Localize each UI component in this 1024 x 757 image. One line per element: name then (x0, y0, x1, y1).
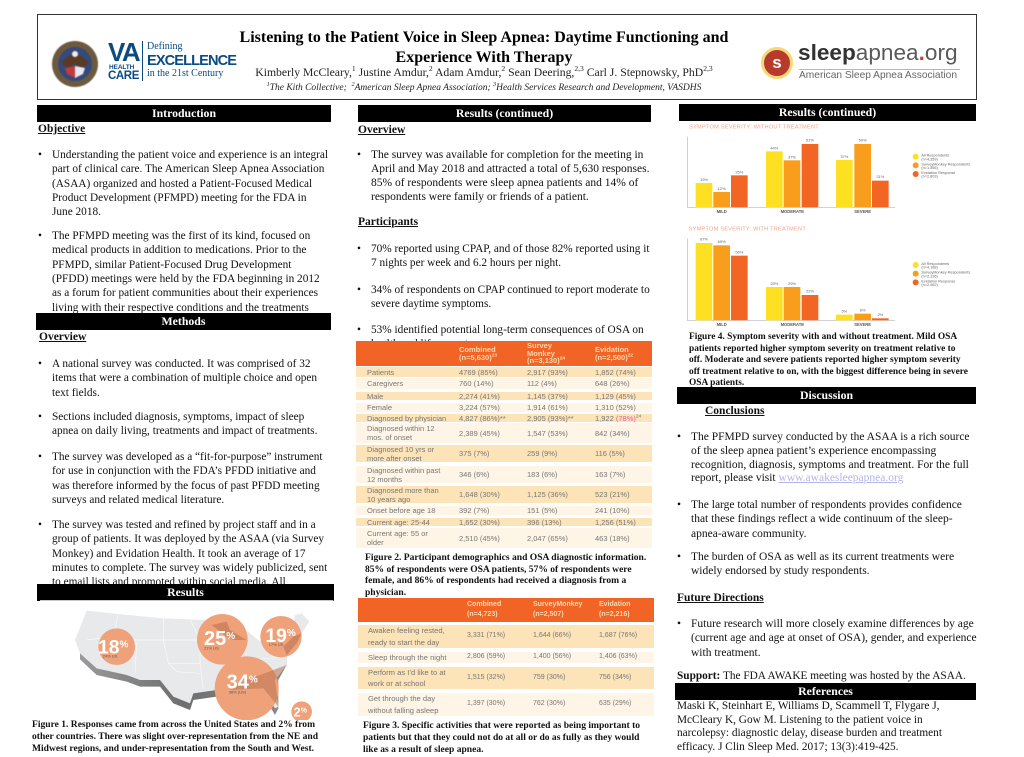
figure 3 caption: patients but that they could not do at all or do as fully as they would (363, 732, 639, 743)
icon: sleepapnea s badge: s (772, 53, 782, 72)
table: desired activities: 1,397 (30%) (467, 700, 505, 707)
text: future research: with treatment. (691, 647, 761, 659)
table: participant demographics: 151 (5%) (527, 506, 557, 515)
table: participant demographics: Female (367, 403, 392, 412)
heading bar: references (675, 683, 976, 700)
table: desired activities (358, 598, 654, 716)
text: survey availability: The survey was available for completion for the meeting in (371, 149, 643, 161)
title: Experience With Therapy (396, 49, 572, 66)
heading bar: discussion: Discussion (800, 388, 853, 402)
text: sections: apnea on daily living, treatments and impact of treatments. (52, 425, 317, 437)
figure 1 caption: Figure 1. Responses came from across the United States and 2% from (32, 719, 315, 730)
table: participant demographics: 2,905 (93%)** (527, 414, 574, 422)
figure 4 caption: off treatment relative to on, with the biggest difference being in severe (689, 366, 968, 376)
text: fit for purpose: The survey was developed as a “fit-for-purpose” instrument (52, 451, 322, 463)
text: respondents: that these findings reflect a wide continuum of the sleep- (691, 513, 953, 525)
text: national survey (52, 357, 317, 400)
VA Health Care logo: EXCELLENCE (147, 53, 236, 69)
table: participant demographics: 842 (34%) (595, 428, 630, 438)
text: tested and refined: minutes to complete. The survey was widely publicized, sent (52, 562, 327, 574)
heading bar: methods: Methods (162, 314, 205, 328)
VA Health Care logo (108, 37, 236, 82)
legend (913, 262, 970, 287)
text: long-term consequences (371, 323, 644, 352)
legend: (n=1,556) (921, 166, 939, 170)
VA Health Care logo: in the 21st Century (147, 68, 223, 79)
text: respondents (691, 498, 962, 541)
heading bar: results: Results (167, 585, 204, 599)
bars: moderate: 22% (806, 289, 814, 294)
heading bar: introduction (37, 105, 331, 122)
text: understanding the patient voice: (ASAA) organized and hosted a Patient-Focused Medical (52, 178, 312, 190)
heading: objective: Objective (38, 123, 85, 135)
legend: All Respondents (921, 262, 949, 266)
table header: Combined (459, 345, 496, 354)
table: participant demographics: Patients (367, 368, 394, 376)
bars: severe: 21% (876, 174, 885, 179)
table: desired activities: Perform as I’d like to at (368, 668, 446, 676)
legend: (n=2,126) (921, 274, 939, 278)
table: participant demographics: mos. of onset (367, 433, 412, 442)
heading bar: results continued (358, 105, 651, 122)
table: participant demographics: 2,274 (41%) (459, 392, 500, 400)
text: fit for purpose: surveys and related medical literature. (52, 494, 224, 506)
table: desired activities: 756 (34%) (599, 674, 631, 681)
callout: 34% south: 34 (227, 672, 249, 694)
table: participant demographics: 1,310 (52%) (595, 403, 636, 412)
callout: 19% northeast: 17% US (269, 642, 284, 647)
legend: Evidation Response (921, 279, 955, 283)
sleepapnea.org logo: American Sleep Apnea Association (799, 70, 957, 81)
table: participant demographics (356, 341, 652, 548)
figure 2 caption: female, and 86% of respondents had received a diagnosis from a (365, 575, 626, 586)
figure 2 caption (365, 552, 646, 597)
callout: 18% west: % (120, 639, 128, 650)
figure 4 caption: off. Moderate and severe patients reported higher symptom severity (689, 355, 961, 365)
table: desired activities: Get through the day (368, 694, 435, 703)
table header (356, 341, 652, 366)
table: participant demographics: 163 (7%) (595, 470, 625, 479)
table: desired activities: 635 (29%) (599, 700, 631, 707)
table: participant demographics: 760 (14%) (459, 379, 494, 388)
text: PFMPD meeting: (PFDD) meetings were held by the FDA beginning in 2012 (52, 273, 320, 285)
callout: 34% south: 38% (US) (229, 690, 247, 695)
figure 1 caption (32, 719, 318, 754)
table: desired activities: 1,687 (76%) (599, 632, 637, 639)
text: understanding the patient voice: Understanding the patient voice and experience is an integral (52, 149, 328, 161)
text: tested and refined: group of patients. It was deployed by the ASAA (via Survey (52, 533, 324, 545)
figure 4 caption: Figure 4. Symptom severity with and without treatment. Mild OSA (689, 332, 957, 342)
heading bar: discussion (677, 387, 976, 404)
legend: SurveyMonkey Respondents (921, 271, 970, 275)
table: participant demographics: Caregivers (367, 379, 403, 388)
heading: future directions: Future Directions (677, 592, 764, 604)
bars: mild: 56% (735, 249, 744, 254)
table: participant demographics: 10 years ago (367, 494, 410, 504)
text: sections: Sections included diagnosis, symptoms, impact of sleep (52, 411, 304, 423)
text: national survey: items that were a combination of multiple choice and open (52, 372, 317, 384)
bars: severe: SEVERE (854, 209, 871, 214)
text: PFMPD survey (691, 431, 970, 486)
bars: moderate (766, 281, 818, 327)
text: long-term consequences: 53% identified potential long-term consequences of OSA on (371, 324, 644, 336)
text: PFMPD meeting: The PFMPD meeting was the first of its kind, focused on (52, 230, 310, 242)
table: participant demographics: 396 (13%) (527, 518, 562, 526)
table: participant demographics: Diagnosed by physician (367, 414, 446, 422)
callout: 2% other countries: % (301, 708, 308, 715)
legend: (n=4,359) (921, 157, 939, 161)
table: desired activities: Sleep through the night (368, 653, 447, 662)
bars: moderate: 29% (788, 281, 796, 286)
table: desired activities: Awaken feeling rested, (368, 626, 445, 635)
text: reference: Maski K, Steinhart E, Williams D, Scammell T, Flygare J, (677, 700, 939, 712)
table header: (n=5,630)23 (459, 352, 497, 362)
legend: (n=2,062) (921, 283, 939, 287)
figure 1 caption: other countries. There was slight over-representation from the NE and (32, 731, 318, 742)
table: participant demographics: Male (367, 392, 383, 400)
heading bar: results continued: Results (continued) (456, 106, 553, 120)
heading bar: results continued, column 3 (679, 104, 976, 121)
table: desired activities: 1,644 (66%) (533, 632, 571, 639)
icon: VA seal (51, 40, 99, 88)
heading bar: methods (36, 313, 331, 330)
table: participant demographics: 1,914 (61%) (527, 403, 568, 412)
table: participant demographics: more after onset (367, 454, 422, 462)
table header: Evidation (595, 345, 629, 354)
heading bar: results continued, column 3: Results (continued) (779, 105, 876, 119)
bars: severe: 5% (841, 308, 848, 313)
bars: moderate: MODERATE (781, 322, 804, 327)
bars: mild: MILD (717, 322, 727, 327)
legend: SurveyMonkey Respondents (921, 162, 970, 166)
text: PFMPD meeting (52, 229, 320, 329)
panel: introduction (38, 123, 328, 313)
text: survey availability: respondents were family or friends of a patient. (371, 191, 589, 203)
table: participant demographics: 1,648 (30%) (459, 490, 500, 499)
sleepapnea.org logo: sleepapnea.org (798, 40, 958, 65)
bars: mild (696, 237, 748, 327)
panel: methods (38, 331, 328, 584)
callout: 25% midwest: 25 (204, 628, 226, 650)
bars: moderate: MODERATE (781, 209, 804, 214)
bars: moderate: 51% (806, 138, 814, 143)
legend (913, 154, 970, 179)
table: participant demographics: 259 (9%) (527, 449, 557, 458)
table: participant demographics: 116 (5%) (595, 449, 625, 458)
callout: 34% south (215, 656, 287, 720)
table: participant demographics: Current age: 25-44 (367, 518, 430, 526)
text: fit for purpose: was therefore informed by the focus of past PFDD meeting (52, 480, 320, 492)
title: Listening to the Patient Voice in Sleep Apnea: Daytime Functioning and (240, 29, 728, 46)
figure 3 caption (363, 720, 640, 755)
callout: 18% west: 18 (98, 637, 120, 658)
authors: Kimberly McCleary,1 Justine Amdur,2 Adam Amdur,2 Sean Deering,2,3 Carl J. Stepnowsky, PhD2,3 (255, 64, 713, 79)
bars: severe (836, 138, 889, 214)
table: participant demographics: 4,827 (86%)** (459, 414, 506, 422)
heading: overview: Overview (39, 331, 86, 343)
table: participant demographics: 183 (6%) (527, 470, 557, 479)
bars: severe (836, 307, 889, 327)
table: desired activities: 3,331 (71%) (467, 632, 505, 639)
heading bar: introduction: Introduction (152, 106, 216, 120)
table: participant demographics: 463 (18%) (595, 534, 630, 542)
VA Health Care logo: VA (108, 37, 139, 67)
bars: moderate (766, 138, 818, 214)
text: burden of OSA: The burden of OSA as well as its current treatments were (691, 551, 954, 563)
heading: overview: Overview (358, 124, 405, 136)
text: tested and refined: Monkey) and Evidation Health. It took an average of 17 (52, 548, 305, 560)
callout: 18% west: 24% US (103, 653, 118, 658)
heading bar: references: References (798, 684, 853, 698)
table header: Monkey (527, 349, 555, 358)
table: participant demographics: 1,125 (36%) (527, 490, 568, 499)
table: participant demographics: 2,047 (65%) (527, 534, 568, 542)
table: desired activities: 1,515 (32%) (467, 674, 505, 681)
table: participant demographics: Diagnosed more than (367, 486, 439, 494)
legend: (n=2,803) (921, 175, 939, 179)
text: PFMPD meeting: as a forum for patient communities about their experiences (52, 287, 318, 299)
callout: 19% northeast: 19 (265, 626, 287, 647)
table: participant demographics: 1,145 (37%) (527, 392, 568, 400)
text: PFMPD survey: recognition, diagnosis, symptoms and treatment. For the full (691, 459, 969, 471)
text: understanding the patient voice: Product Development (PFMPD) meeting for the FDA in (52, 192, 306, 204)
text: daytime symptoms (371, 283, 650, 312)
table: participant demographics: 2,389 (45%) (459, 428, 500, 438)
table: desired activities: 2,806 (59%) (467, 653, 505, 660)
table: participant demographics: Current age: 55 or (367, 529, 428, 538)
legend: Evidation Response (921, 171, 955, 175)
table header: (n=4,723) (467, 611, 498, 618)
text: CPAP use: 7 nights per week and 6.2 hours per night. (371, 257, 561, 269)
bars: moderate: 29% (770, 281, 779, 286)
text: national survey: text fields. (52, 387, 100, 399)
text: support: Support: The FDA AWAKE meeting was hosted by the ASAA. (677, 670, 966, 682)
text: survey availability (371, 149, 649, 205)
table: desired activities: ready to start the day (368, 638, 439, 646)
legend: All Respondents (921, 154, 949, 158)
text: daytime symptoms: severe daytime symptoms. (371, 298, 491, 310)
text: respondents: apnea-aware community. (691, 528, 806, 540)
table: desired activities: 762 (30%) (533, 700, 565, 707)
table: participant demographics: 2,510 (45%) (459, 534, 500, 542)
bars: mild: 65% (718, 239, 726, 244)
table header: (n=2,500)22 (595, 352, 633, 362)
bars: severe: 6% (860, 307, 866, 312)
table header: (n=2,507) (533, 611, 564, 618)
VA Health Care logo: CARE (108, 70, 139, 82)
table: participant demographics: Diagnosed within 12 (367, 424, 435, 433)
text: reference: efficacy. J Clin Sleep Med. 2017; 13(3):419-425. (677, 740, 899, 752)
affiliations: 1The Kith Collective; 2American Sleep Apnea Association; 3Health Services Research and Development, VASDHS (267, 82, 701, 93)
text: future research: (current age and age at onset of OSA), gender, and experience (691, 632, 977, 644)
sleepapnea.org logo (761, 40, 960, 81)
bars: moderate: 44% (770, 145, 779, 150)
map: US responses (40, 600, 334, 720)
table: participant demographics: 1,652 (30%) (459, 518, 500, 526)
table: participant demographics: 1,256 (51%) (595, 518, 636, 526)
VA Health Care logo: Defining (147, 41, 183, 52)
callout: 25% midwest: 21% US (204, 645, 219, 650)
bars: mild (696, 169, 748, 214)
table header: SurveyMonkey (533, 601, 582, 608)
heading bar: results (37, 584, 334, 601)
table header: (n=3,130)24 (527, 356, 565, 365)
title (240, 29, 728, 66)
table: participant demographics: 1,547 (53%) (527, 428, 568, 438)
table: participant demographics: 1,922 (78%)24 (595, 414, 641, 422)
text: understanding the patient voice: June 2018. (52, 206, 101, 218)
panel: results continued, overview text (358, 124, 650, 341)
text: tested and refined (52, 518, 327, 590)
chart: symptom severity with treatment: SYMPTOM SEVERITY: WITH TREATMENT (689, 226, 806, 232)
text: burden of OSA: widely endorsed by study respondents. (691, 565, 870, 577)
text: survey availability: April and May 2018 and attracted a total of 5,630 responses. (371, 163, 649, 175)
text: fit for purpose: for use in conjunction with the FDA’s PFDD initiative and (52, 465, 316, 477)
table: participant demographics: 392 (7%) (459, 506, 489, 515)
bars: mild: MILD (717, 209, 727, 214)
bars: mild: 67% (700, 237, 708, 242)
callout: 2% other countries (291, 701, 312, 722)
figure 3 caption: like as a result of sleep apnea. (363, 744, 484, 755)
table: participant demographics: 523 (21%) (595, 490, 630, 499)
text: reference: narcolepsy: diagnostic delay, disease burden and treatment (677, 727, 942, 739)
chart: symptom severity with treatment (687, 226, 970, 327)
VA Health Care logo: HEALTH (109, 64, 134, 71)
text: future research: Future research will more closely examine differences by age (691, 618, 974, 630)
table: desired activities: 1,406 (63%) (599, 653, 637, 660)
heading: conclusions: Conclusions (705, 405, 764, 417)
bars: mild: 25% (735, 169, 744, 174)
table: participant demographics: 2,917 (93%) (527, 368, 568, 376)
callout: 19% northeast (260, 616, 302, 657)
table: participant demographics: 1,129 (45%) (595, 392, 636, 400)
callout: 25% midwest (197, 614, 248, 665)
text: PFMPD meeting: PFMPD, similar Patient-Focused Drug Development (52, 259, 291, 271)
text: survey availability: 85% of respondents were sleep apnea patients and 14% of (371, 177, 638, 189)
table: desired activities: without falling asleep (368, 706, 438, 714)
table: participant demographics: 3,224 (57%) (459, 403, 500, 412)
text: reference (677, 700, 942, 752)
bars: severe: 37% (840, 154, 849, 159)
table: participant demographics: 375 (7%) (459, 449, 489, 458)
chart: symptom severity without treatment: SYMPTOM SEVERITY: WITHOUT TREATMENT (689, 124, 819, 130)
text: understanding the patient voice (52, 148, 328, 220)
table: participant demographics: Onset before age 18 (367, 506, 435, 515)
heading: participants: Participants (358, 216, 418, 228)
table header (358, 598, 654, 622)
callout: 2% other countries: 2 (294, 705, 301, 719)
bars: moderate: 37% (788, 154, 796, 159)
header banner (37, 14, 977, 100)
figure 4 caption (689, 332, 968, 387)
table: participant demographics: 648 (26%) (595, 379, 630, 388)
bars: mild: 19% (700, 177, 708, 182)
table: desired activities: work or at school (368, 679, 425, 688)
table header: Evidation (599, 601, 631, 608)
bars: mild: 12% (718, 186, 726, 191)
text: CPAP use: 70% reported using CPAP, and of those 82% reported using it (371, 243, 650, 255)
text: burden of OSA (691, 550, 954, 579)
table: participant demographics: older (367, 538, 384, 547)
bars: severe: 2% (877, 312, 884, 317)
text: PFMPD survey: The PFMPD survey conducted by the ASAA is a rich source (691, 431, 970, 443)
table: participant demographics: Diagnosed 10 yrs or (367, 444, 434, 454)
table: participant demographics: 4769 (85%) (459, 368, 498, 376)
figure 2 caption: 85% of respondents were OSA patients, 57% of respondents were (365, 564, 632, 575)
text: national survey: A national survey was conducted. It was comprised of 32 (52, 358, 311, 370)
bars: severe: 50% (859, 138, 867, 143)
text: PFMPD survey: report, please visit www.awakesleepapnea.org (691, 472, 903, 484)
text: tested and refined: The survey was tested and refined by project staff and in a (52, 519, 316, 531)
text: understanding the patient voice: part of clinical care. The American Sleep Apnea Association (52, 163, 324, 175)
figure 3 caption: Figure 3. Specific activities that were reported as being important to (363, 720, 640, 731)
text: CPAP use (371, 242, 650, 271)
text: PFMPD meeting: medical products in addition to medications. Prior to the (52, 244, 306, 256)
table: participant demographics: 346 (6%) (459, 470, 489, 479)
table: desired activities: 1,400 (56%) (533, 653, 571, 660)
table header: (n=2,216) (599, 611, 630, 618)
table: participant demographics: Diagnosed within past (367, 466, 440, 474)
figure 2 caption: Figure 2. Participant demographics and OSA diagnostic information. (365, 552, 646, 563)
text: fit for purpose (52, 450, 322, 507)
table: desired activities: 759 (30%) (533, 674, 565, 681)
text: daytime symptoms: 34% of respondents on CPAP continued to report moderate to (371, 284, 650, 296)
chart: symptom severity without treatment (687, 124, 970, 214)
callout: 18% west (98, 628, 135, 665)
figure 1 caption: Midwest regions, and under-representation from the South and West. (32, 743, 314, 754)
text: future research (691, 617, 977, 660)
table: participant demographics: 12 months (367, 474, 402, 484)
table: participant demographics: 241 (10%) (595, 506, 630, 515)
table header: Combined (467, 601, 501, 608)
legend: (n=4,188) (921, 266, 939, 270)
callout: 34% south: % (249, 675, 258, 686)
text: respondents: The large total number of respondents provides confidence (691, 499, 962, 511)
table header: Survey (527, 341, 552, 350)
panel: discussion (677, 405, 977, 682)
table: participant demographics: 1,852 (74%) (595, 368, 636, 376)
callout: 19% northeast: % (287, 628, 296, 639)
text: reference: McCleary K, Gow M. Listening to the patient voice in (677, 714, 923, 726)
figure 4 caption: patients reported higher symptom severity on treatment relative to (689, 344, 955, 354)
table: participant demographics: 112 (4%) (527, 379, 557, 388)
text: sections (52, 410, 317, 439)
icon: sleepapnea s badge (761, 47, 793, 79)
text: PFMPD survey: of the sleep apnea patient’s experience encompassing (691, 445, 936, 457)
bars: severe: SEVERE (854, 322, 871, 327)
callout: 25% midwest: % (226, 631, 235, 642)
